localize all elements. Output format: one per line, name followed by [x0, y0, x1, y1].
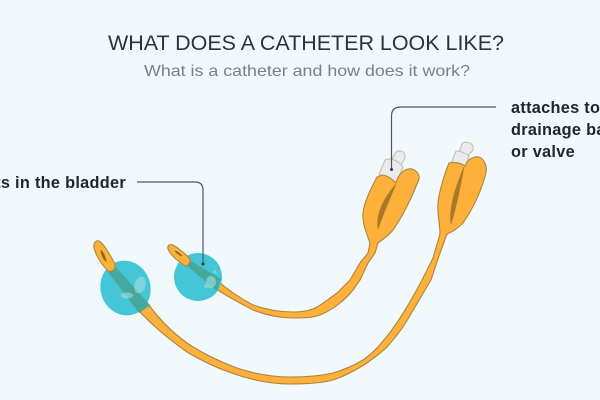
- large catheter connector: [450, 142, 473, 172]
- small catheter tube and drainage head: [216, 169, 419, 318]
- small catheter tip eyelet: [175, 251, 182, 256]
- large catheter slit: [451, 167, 464, 224]
- large catheter tube and drainage head: [140, 157, 486, 384]
- subtitle: What is a catheter and how does it work?: [144, 63, 470, 80]
- drainage label: or valve: [511, 143, 575, 161]
- small catheter: [168, 151, 419, 318]
- bladder leader line: [137, 182, 203, 263]
- bladder leader dot: [202, 262, 204, 266]
- drainage leader dot: [390, 168, 393, 171]
- drainage leader line: [392, 107, 496, 169]
- small catheter balloon: [174, 253, 222, 301]
- large catheter inner tube: [108, 267, 150, 313]
- callout: drainage: [390, 99, 600, 171]
- small catheter tip: [168, 245, 190, 266]
- callout: bladder: [0, 174, 204, 266]
- small catheter slit: [378, 184, 396, 229]
- title: WHAT DOES A CATHETER LOOK LIKE?: [108, 31, 504, 55]
- large catheter tip eyelet: [101, 251, 106, 261]
- large catheter: [94, 142, 486, 384]
- small catheter inner tube: [186, 261, 221, 291]
- small catheter connector: [379, 151, 405, 182]
- small catheter balloon highlights: [204, 270, 216, 288]
- large catheter balloon: [94, 255, 157, 321]
- large catheter tip: [94, 241, 115, 271]
- large catheter balloon highlights: [121, 275, 148, 298]
